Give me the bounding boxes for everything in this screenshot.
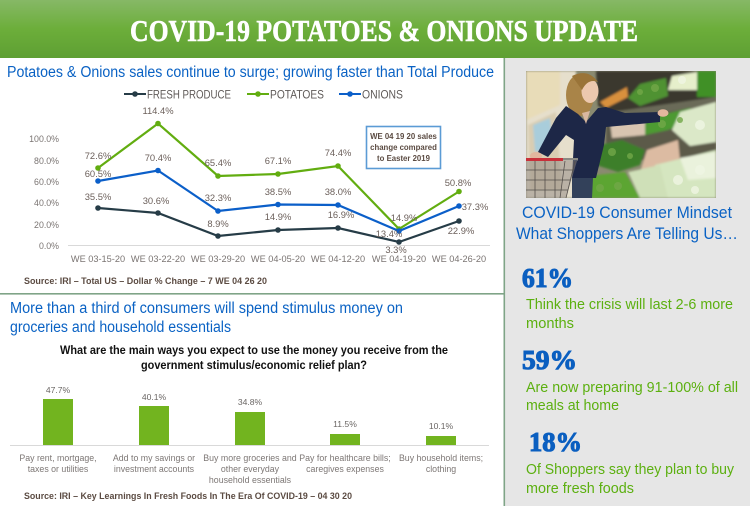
x axis labels: WE 03-29-20	[191, 254, 245, 264]
callout: Easter comparison: to Easter 2019	[377, 154, 431, 163]
bar chart: other everyday	[221, 464, 280, 474]
stat: 18%: more fresh foods	[526, 481, 634, 497]
stat: 59%: Are now preparing 91-100% of all	[526, 380, 738, 396]
callout: Easter comparison	[366, 126, 440, 168]
bar chart: clothing	[426, 464, 456, 474]
y axis labels: 60.0%	[34, 177, 59, 187]
photo: shopper in produce aisle	[526, 71, 716, 198]
y axis labels	[29, 134, 59, 251]
data labels	[85, 105, 488, 255]
heading: stimulus spending	[10, 300, 403, 336]
shopping cart	[526, 158, 578, 198]
bar chart: Buy more groceries and	[203, 453, 297, 463]
source note: stimulus chart: Source: IRI – Key Learnings In Fresh Foods In The Era Of COVID-19 – 04 30 20	[24, 491, 352, 502]
y axis labels: 20.0%	[34, 220, 59, 230]
data labels: 22.9%	[448, 225, 474, 236]
chart legend: ONIONS	[362, 90, 403, 102]
title: COVID-19 POTATOES & ONIONS UPDATE	[130, 13, 638, 48]
stat: 61%: 61%	[522, 263, 573, 293]
sidebar heading	[516, 204, 738, 243]
bar chart: Add to my savings or	[113, 453, 195, 463]
data labels: 30.6%	[143, 195, 169, 206]
line series: fresh produce	[95, 205, 462, 245]
data labels: 74.4%	[325, 147, 351, 158]
data labels: 32.3%	[205, 192, 231, 203]
data labels: 37.3%	[462, 201, 488, 212]
y axis labels: 0.0%	[39, 241, 59, 251]
data labels: 14.9%	[265, 211, 291, 222]
line series: potatoes	[95, 121, 462, 232]
shopper torso and arms	[538, 106, 660, 178]
bar chart: Pay rent, mortgage,	[19, 453, 97, 463]
y axis labels: 100.0%	[29, 134, 59, 144]
data labels: 38.5%	[265, 186, 291, 197]
panel: potatoes and onions sales chart	[7, 64, 494, 287]
data labels: 3.3%	[385, 244, 407, 255]
stat: 61%: months	[526, 316, 574, 332]
data labels: 50.8%	[445, 177, 471, 188]
line series: onions	[95, 168, 462, 234]
chart legend: POTATOES	[270, 90, 324, 102]
bar chart: 10.1%	[429, 421, 454, 431]
heading: stimulus spending: groceries and household essentials	[10, 319, 231, 336]
bar chart: Buy household items;	[399, 453, 483, 463]
sidebar heading: COVID-19 Consumer Mindset	[522, 204, 732, 222]
data labels: 13.4%	[376, 228, 402, 239]
callout: Easter comparison: WE 04 19 20 sales	[370, 132, 438, 141]
x axis labels: WE 03-22-20	[131, 254, 185, 264]
x axis labels: WE 04-26-20	[432, 254, 486, 264]
chart legend: FRESH PRODUCE	[147, 90, 231, 102]
bar chart	[10, 385, 489, 485]
x axis labels	[71, 254, 486, 264]
stat: 18%	[526, 427, 735, 497]
stat: 18%: Of Shoppers say they plan to buy	[526, 462, 735, 478]
stat: 59%: meals at home	[526, 398, 619, 414]
x axis labels: WE 04-19-20	[372, 254, 426, 264]
bar chart: 34.8%	[238, 397, 263, 407]
data labels: 72.6%	[85, 150, 111, 161]
panel: header banner	[0, 0, 750, 58]
x axis labels: WE 04-12-20	[311, 254, 365, 264]
bar chart: taxes or utilities	[28, 464, 89, 474]
callout: Easter comparison: change compared	[370, 143, 437, 152]
panel: consumer mindset sidebar	[504, 58, 750, 506]
bar chart: investment accounts	[114, 464, 195, 474]
stat: 61%: Think the crisis will last 2-6 more	[526, 297, 733, 313]
data labels: 67.1%	[265, 155, 291, 166]
bar chart: 47.7%	[46, 385, 71, 395]
survey question: government stimulus/economic relief plan?	[141, 358, 367, 372]
data labels: 14.9%	[391, 212, 417, 223]
panel: stimulus spending chart	[10, 300, 489, 502]
data labels: 16.9%	[328, 209, 354, 220]
x axis labels: WE 04-05-20	[251, 254, 305, 264]
bar chart: household essentials	[209, 475, 292, 485]
survey question: What are the main ways you expect to use the money you receive from the	[60, 343, 448, 357]
stat: 59%: 59%	[522, 345, 577, 375]
stat: 18%: 18%	[529, 427, 582, 457]
data labels: 65.4%	[205, 157, 231, 168]
data labels: 35.5%	[85, 191, 111, 202]
y axis labels: 40.0%	[34, 198, 59, 208]
chart legend	[124, 90, 403, 102]
sidebar heading: What Shoppers Are Telling Us…	[516, 225, 738, 243]
data labels: 8.9%	[207, 218, 229, 229]
data labels: 60.5%	[85, 168, 111, 179]
data labels: 38.0%	[325, 186, 351, 197]
heading: stimulus spending: More than a third of consumers will spend stimulus money on	[10, 300, 403, 317]
stat: 59%	[522, 345, 738, 414]
bar chart: 40.1%	[142, 392, 167, 402]
bar chart: Pay for healthcare bills;	[299, 453, 391, 463]
bar chart: 11.5%	[333, 419, 357, 429]
bar chart: caregives expenses	[306, 464, 384, 474]
heading: sales surge: Potatoes & Onions sales continue to surge; growing faster than Total Produce	[7, 64, 494, 81]
data labels: 114.4%	[142, 105, 174, 116]
source note: sales chart: Source: IRI – Total US – Dollar % Change – 7 WE 04 26 20	[24, 276, 267, 287]
x axis labels: WE 03-15-20	[71, 254, 125, 264]
shopper hair and face	[566, 73, 598, 116]
data labels: 70.4%	[145, 152, 171, 163]
y axis labels: 80.0%	[34, 156, 59, 166]
stat: 61%	[522, 263, 733, 332]
survey question	[60, 343, 448, 372]
